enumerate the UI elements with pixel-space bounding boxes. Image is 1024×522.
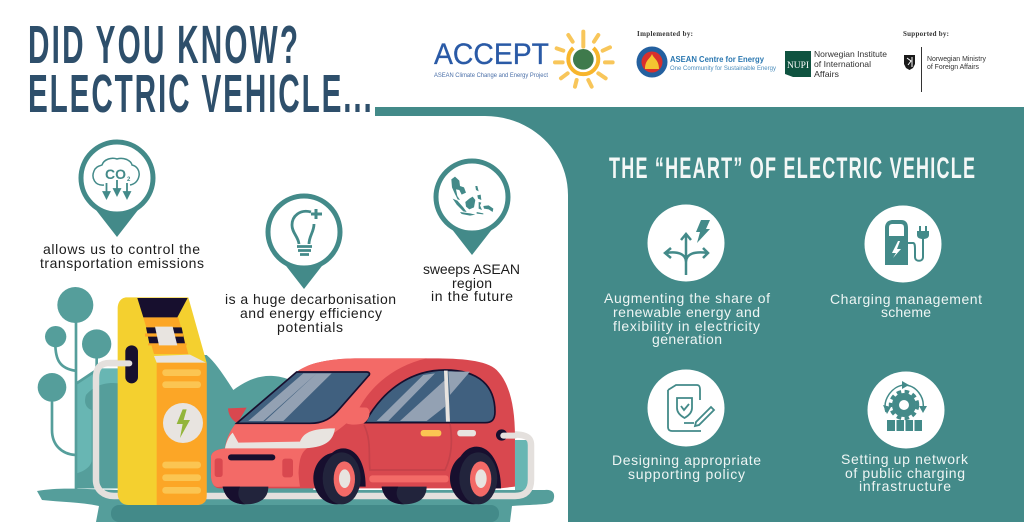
rear spoiler	[228, 408, 247, 423]
icon: CO2 cloud: CO	[105, 166, 126, 182]
charging cable	[96, 363, 531, 496]
text: charging management: Charging management	[830, 291, 982, 307]
text: emissions: transportation emissions	[40, 255, 204, 271]
icon: bulb plus	[292, 209, 322, 254]
text: sweeps ASEAN: in the future	[431, 288, 513, 304]
logo: NUPI: Norwegian Institute	[814, 49, 887, 59]
text: public charging: infrastructure	[859, 478, 951, 494]
logo: ACCEPT: ASEAN Climate Change and Energy Project	[434, 73, 548, 79]
heading: the heart of electric vehicle: THE “HEART” OF ELECTRIC VEHICLE	[609, 153, 975, 185]
icon: policy document	[648, 370, 724, 446]
logo: NUPI: Affairs	[814, 69, 839, 79]
icon: CO2 cloud: 2	[127, 177, 131, 183]
charging station	[110, 297, 207, 505]
ground	[37, 489, 554, 522]
title: DID YOU KNOW?	[28, 16, 298, 75]
icon: charging station	[864, 206, 942, 282]
logo: ASEAN Centre for Energy: ASEAN Centre for Energy	[670, 55, 765, 64]
logo: ASEAN Centre for Energy: One Community for Sustainable Energy	[670, 66, 776, 72]
logo: Norwegian Ministry of Foreign Affairs: Norwegian Ministry	[927, 56, 986, 63]
headlight	[225, 428, 335, 448]
text: decarbonisation: and energy efficiency	[240, 305, 382, 321]
text: emissions: allows us to control the	[43, 241, 200, 257]
logo: NUPI	[785, 49, 887, 79]
label: supported by: Supported by:	[903, 30, 949, 38]
text: augmenting: flexibility in electricity	[613, 318, 760, 334]
pin: light bulb	[268, 196, 340, 289]
pin: CO2	[81, 142, 153, 237]
electric car	[211, 358, 515, 504]
wheels	[223, 447, 501, 504]
text: decarbonisation: is a huge decarbonisation	[225, 291, 396, 307]
teal background panel	[375, 107, 1024, 522]
text: decarbonisation: potentials	[277, 319, 343, 335]
text: designing policy: supporting policy	[628, 466, 745, 482]
logo: Norwegian Ministry of Foreign Affairs: of Foreign Affairs	[927, 64, 979, 71]
text: designing policy: Designing appropriate	[612, 452, 761, 468]
illustration: background hill and trees	[38, 287, 313, 493]
text: charging management: scheme	[881, 304, 931, 320]
text: charging management	[830, 291, 982, 320]
text: designing policy	[612, 452, 761, 482]
icon: arrows and lightning	[648, 204, 724, 282]
title: ELECTRIC VEHICLE...	[28, 65, 372, 124]
icon: CO2 cloud	[93, 158, 139, 198]
text: sweeps ASEAN	[423, 261, 520, 304]
text: augmenting: generation	[652, 331, 722, 347]
text: augmenting: Augmenting the share of	[604, 290, 770, 306]
windshield	[237, 372, 370, 423]
charge port	[496, 429, 507, 441]
logo: ASEAN Centre for Energy	[636, 46, 776, 78]
logo: Norwegian Ministry of Foreign Affairs	[904, 47, 986, 92]
car body	[211, 358, 515, 488]
side windows	[365, 370, 495, 423]
mirror	[340, 407, 370, 425]
door	[364, 423, 451, 470]
icon: gear and network	[868, 372, 944, 448]
label: implemented by: Implemented by:	[637, 30, 693, 38]
logo: ACCEPT	[434, 32, 613, 87]
text: public charging: Setting up network	[841, 451, 969, 467]
text: public charging	[841, 451, 969, 494]
text: sweeps ASEAN: region	[452, 275, 492, 291]
logo: ACCEPT: ACCEPT	[434, 38, 549, 71]
text: decarbonisation	[225, 291, 396, 335]
text: augmenting	[604, 290, 770, 347]
logo: NUPI: of International	[814, 59, 871, 69]
text: augmenting: renewable energy and	[613, 304, 760, 320]
icon: southeast Asia map	[451, 177, 493, 216]
teal patch behind cable	[515, 440, 530, 490]
text: public charging: of public charging	[845, 465, 965, 481]
logo: NUPI: NUPI	[787, 60, 809, 70]
title	[28, 16, 372, 124]
text: sweeps ASEAN: sweeps ASEAN	[423, 261, 520, 277]
text: emissions	[40, 241, 204, 271]
pin: ASEAN map	[436, 161, 508, 255]
